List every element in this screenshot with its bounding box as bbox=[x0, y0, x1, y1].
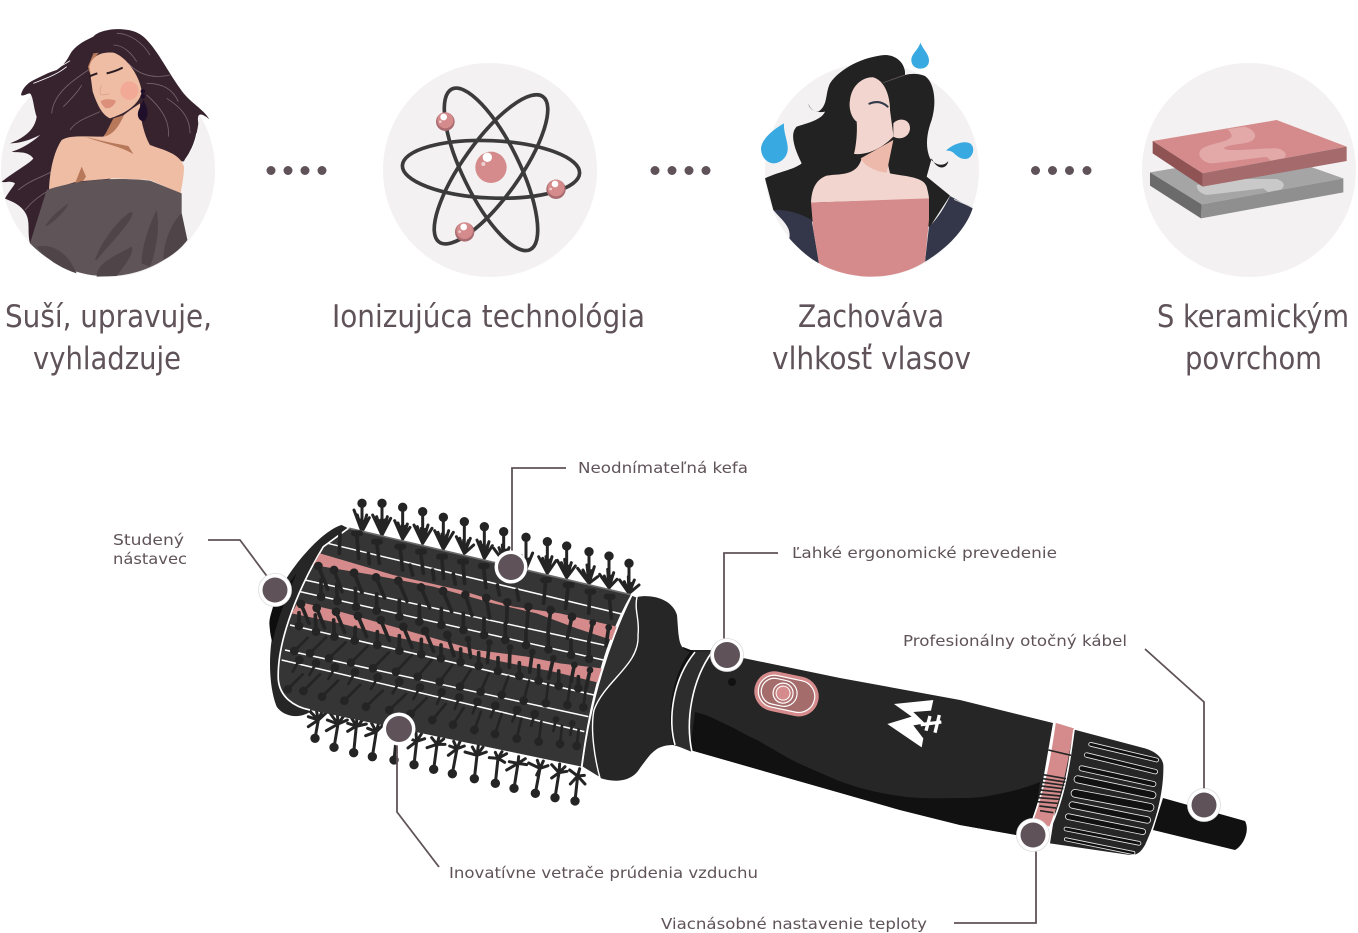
dots connector 2 bbox=[650, 166, 710, 175]
barrel slot lines bbox=[282, 543, 622, 732]
marker: Inovatívne vetrače bbox=[382, 712, 416, 746]
barrel pins bbox=[288, 533, 613, 746]
brush neck bbox=[593, 596, 690, 781]
marker: Studený nástavec bbox=[258, 574, 292, 606]
barrel end cap bbox=[270, 525, 348, 716]
label: Profesionálny otočný kábel: Profesionálny otočný kábel bbox=[903, 632, 1127, 650]
icon: woman with moisture drops bbox=[761, 43, 979, 277]
brush bristles and barrel bbox=[269, 503, 639, 801]
collar bbox=[657, 647, 712, 752]
neck side panel bbox=[582, 595, 638, 778]
dots connector 3 bbox=[1031, 166, 1092, 175]
icon: atom bbox=[383, 63, 597, 277]
illustration: hair brush bbox=[269, 503, 1247, 855]
leader lines bbox=[208, 468, 1204, 923]
pink temperature band and end knob bbox=[1033, 723, 1163, 855]
label: Studený nástavec: Studený bbox=[113, 531, 184, 549]
label: Studený nástavec bbox=[113, 531, 187, 568]
logo bbox=[887, 700, 941, 747]
label: Inovatívne vetrače prúdenia vzduchu: Inovatívne vetrače prúdenia vzduchu bbox=[449, 864, 758, 882]
label: Studený nástavec: nástavec bbox=[113, 550, 187, 568]
label: Neodnímateľná kefa: Neodnímateľná kefa bbox=[578, 459, 748, 477]
icon: woman with flowing hair bbox=[1, 29, 215, 277]
handle shadow bbox=[690, 712, 1040, 838]
power cord bbox=[1153, 798, 1247, 850]
dots connector 1 bbox=[266, 166, 326, 175]
heading: Suší, upravuje, vyhladzuje: vyhladzuje bbox=[33, 341, 181, 377]
heading: S keramickým povrchom: povrchom bbox=[1185, 341, 1322, 377]
heading: Zachováva vlhkosť vlasov bbox=[772, 299, 971, 377]
icon: ceramic plates bbox=[1142, 63, 1356, 277]
marker: Profesionálny kábel bbox=[1188, 788, 1220, 822]
label: Viacnásobné nastavenie teploty: Viacnásobné nastavenie teploty bbox=[661, 915, 927, 933]
label: Ľahké ergonomické prevedenie: Ľahké ergonomické prevedenie bbox=[792, 544, 1057, 562]
heading: Suší, upravuje, vyhladzuje bbox=[5, 299, 212, 377]
marker: Neodnímateľná kefa bbox=[494, 550, 528, 584]
heading: S keramickým povrchom bbox=[1157, 299, 1349, 377]
power button bbox=[728, 668, 822, 720]
heading: Zachováva vlhkosť vlasov: Zachováva bbox=[798, 299, 944, 335]
heading: Ionizujúca technológia: Ionizujúca technológia bbox=[332, 299, 645, 335]
barrel body bbox=[278, 528, 632, 767]
heading: Zachováva vlhkosť vlasov: vlhkosť vlasov bbox=[772, 341, 971, 377]
pink stripes bbox=[313, 553, 617, 640]
bristles behind barrel bbox=[308, 503, 639, 801]
marker: Ľahké prevedenie bbox=[710, 638, 744, 672]
marker: Viacnásobné nastavenie bbox=[1016, 818, 1050, 852]
heading: Suší, upravuje, vyhladzuje: Suší, upravuje, bbox=[5, 299, 212, 335]
handle bbox=[673, 650, 1053, 838]
